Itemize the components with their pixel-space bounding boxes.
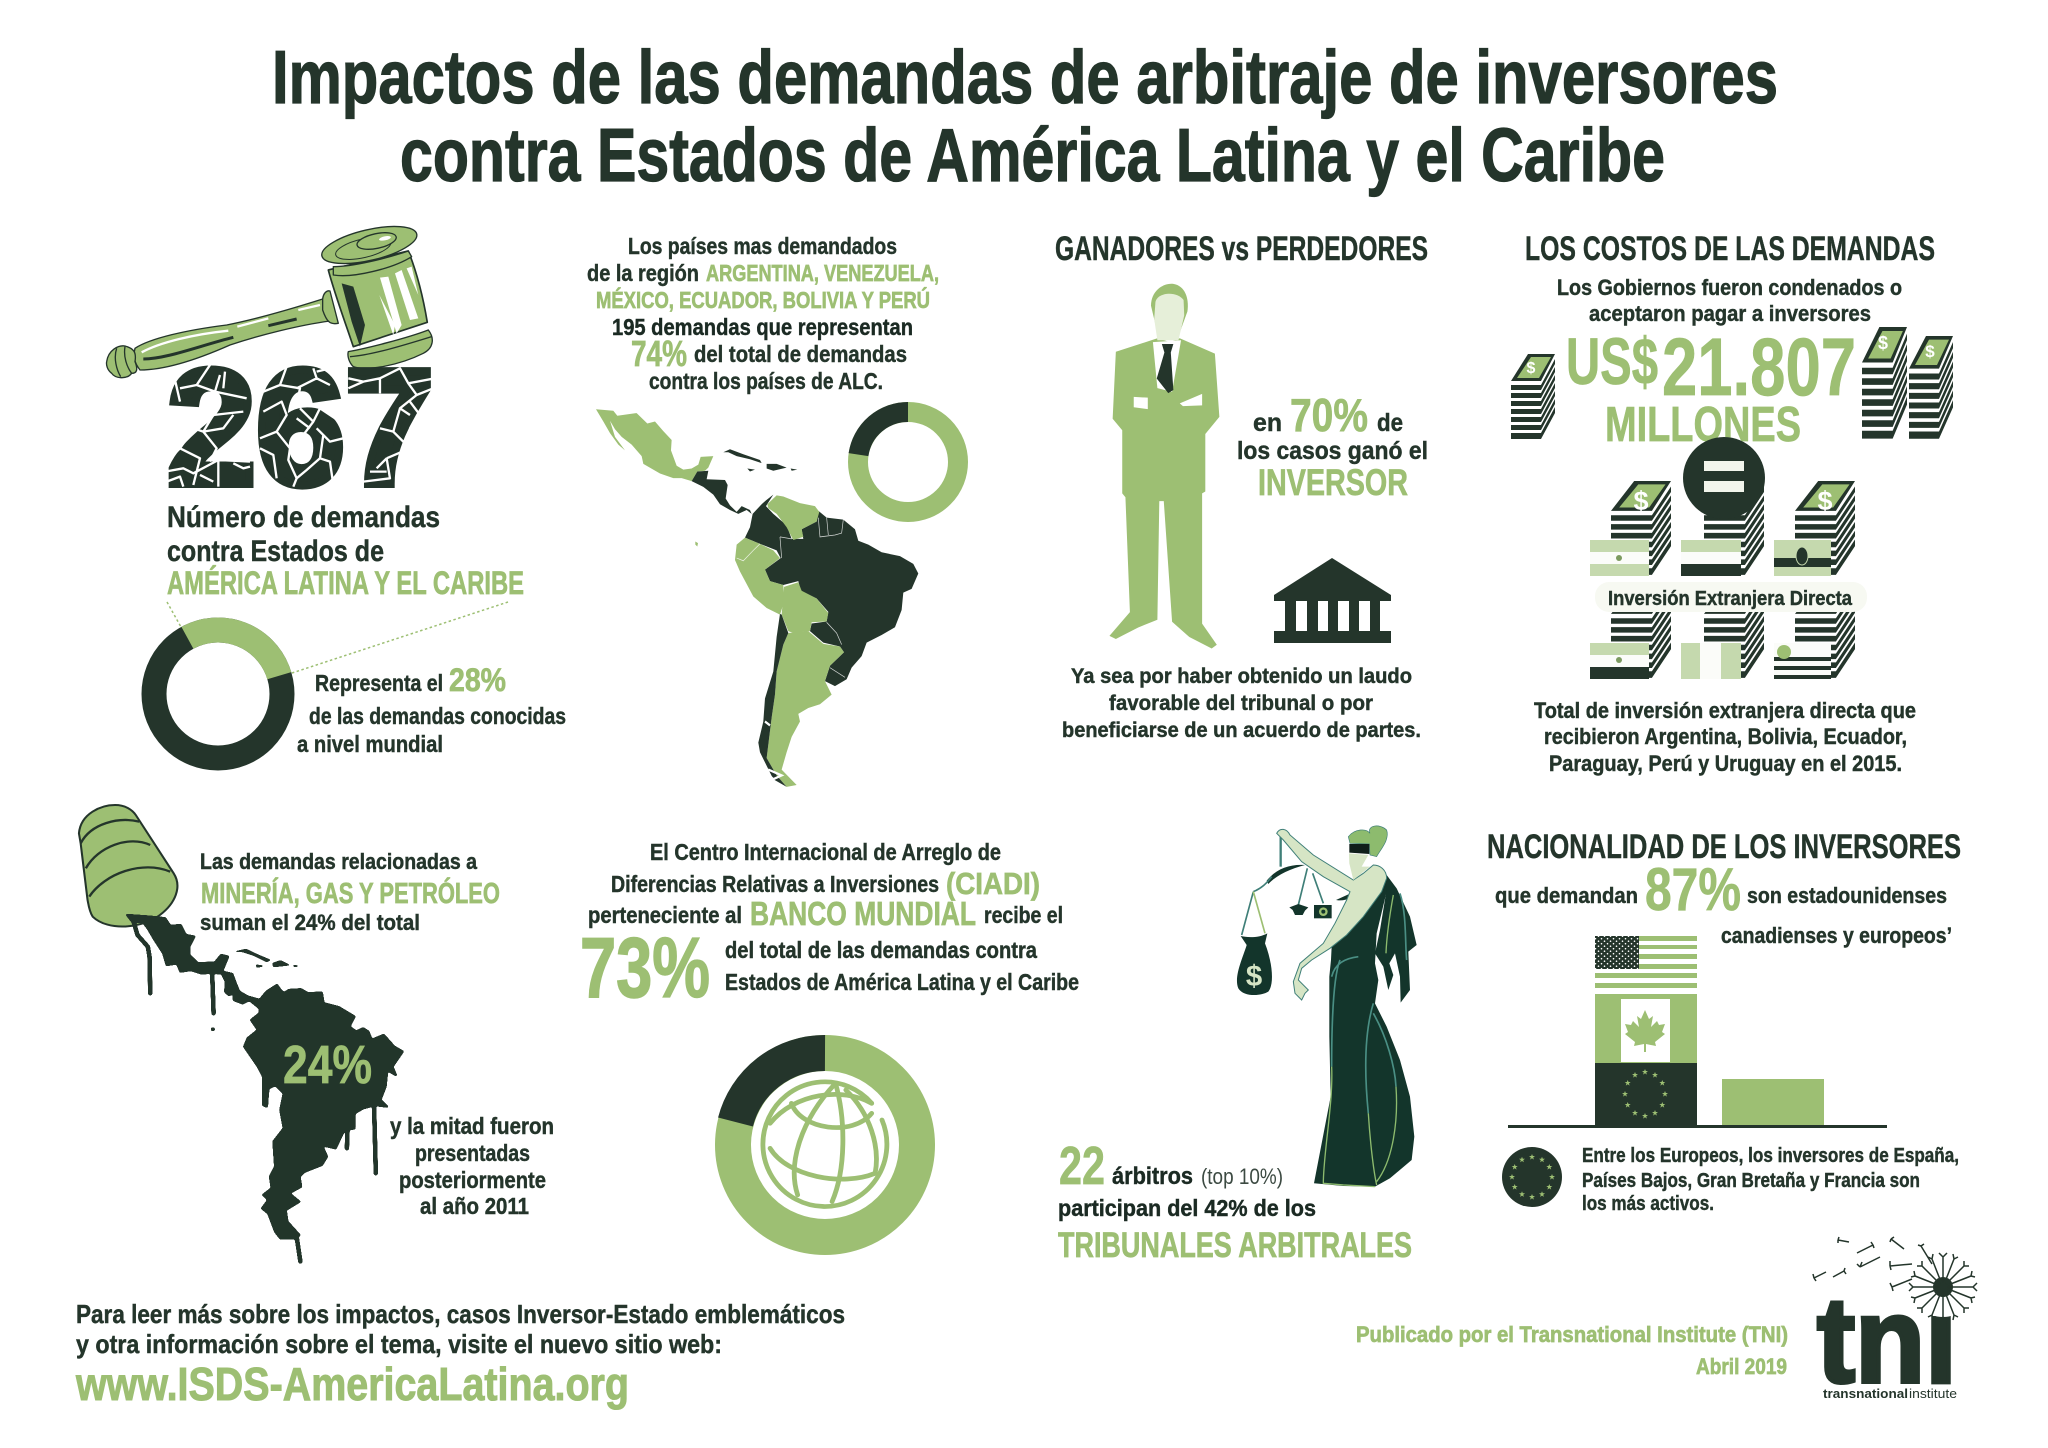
- text: 22 árbitros: 22: [1059, 1136, 1105, 1196]
- text: CIADI: [580, 839, 1079, 1016]
- text: 22 árbitros: (top 10%): [1201, 1164, 1283, 1189]
- number 24%: 24%: [283, 1035, 372, 1095]
- text: CIADI: (CIADI): [946, 866, 1040, 901]
- text: número de demandas: Número de demandas: [167, 501, 440, 534]
- icon: businessman: [1109, 284, 1219, 649]
- panel: ganadores vs perdedores: [1055, 230, 1428, 742]
- icon: money stacks row 1 with flags: $: [1817, 486, 1833, 516]
- text: total de inversión: Paraguay, Perú y Uruguay en el 2015.: [1549, 751, 1902, 776]
- text: CIADI: perteneciente al: [588, 902, 742, 928]
- title: [272, 35, 1778, 197]
- footer: publisher: Abril 2019: [1696, 1354, 1787, 1379]
- text: 22 árbitros: TRIBUNALES ARBITRALES: [1058, 1226, 1412, 1265]
- footer: website: www.ISDS-AmericaLatina.org: [75, 1358, 629, 1410]
- footer: website: y otra información sobre el tema, visite el nuevo sitio web:: [76, 1329, 722, 1359]
- donut chart: 28%: [154, 630, 282, 758]
- text: CIADI: del total de las demandas contra: [725, 937, 1037, 963]
- text: representa el 28%: a nivel mundial: [297, 731, 443, 757]
- icon: oil barrel and spill map: [79, 805, 403, 1262]
- text: representa el 28%: de las demandas conocidas: [309, 703, 566, 729]
- text: minería: MINERÍA, GAS Y PETRÓLEO: [201, 876, 500, 910]
- illustration: lady justice: $: [1246, 960, 1262, 993]
- text: número de demandas: [167, 501, 524, 601]
- number 267: 267: [167, 336, 434, 519]
- footer: website: [75, 1299, 845, 1410]
- panel: nacionalidad de los inversores: [1487, 828, 1961, 1215]
- text: mitad fueron: y la mitad fueron: [390, 1113, 554, 1139]
- panel: árbitros: [1058, 826, 1417, 1265]
- icon: dandelion: [1813, 1237, 1977, 1321]
- icon: money stack left: [1511, 354, 1555, 439]
- text: en 70%: los casos ganó el: [1237, 437, 1428, 465]
- text: en 70%: [1237, 389, 1428, 503]
- text: laudo: favorable del tribunal o por: [1109, 691, 1374, 715]
- icon: money stacks right: [1862, 327, 1953, 439]
- donut chart: 73%: [733, 1053, 917, 1237]
- panel: 267 demandas: [107, 219, 566, 758]
- text: gobiernos condenados: Los Gobiernos fueron condenados o: [1557, 275, 1902, 300]
- text: 87%: son estadounidenses: [1747, 883, 1947, 908]
- text: 22 árbitros: árbitros: [1112, 1163, 1193, 1190]
- text: 22 árbitros: [1058, 1136, 1412, 1265]
- icon: money stacks right: $: [1925, 342, 1935, 361]
- footer: publisher: Publicado por el Transnational Institute (TNI): [1356, 1322, 1788, 1347]
- text: europeos: Entre los Europeos, los inversores de España,: [1582, 1145, 1959, 1167]
- icon: money stacks row 1 with flags: [1590, 481, 1855, 576]
- amount: MILLONES: [1605, 398, 1801, 452]
- illustration: lady justice: [1237, 826, 1417, 1187]
- panel: costos de las demandas: [1511, 230, 1953, 776]
- amount: 21.807: [1662, 322, 1856, 413]
- icon: equals sign: [1683, 437, 1765, 519]
- heading: GANADORES vs PERDEDORES: [1055, 230, 1428, 268]
- text: 87%: 87%: [1645, 856, 1741, 923]
- text: total de inversión: Total de inversión extranjera directa que: [1534, 698, 1916, 723]
- text: laudo: Ya sea por haber obtenido un laudo: [1071, 664, 1412, 688]
- icon: money stacks right: $: [1878, 333, 1888, 353]
- icon: money stack left: $: [1527, 360, 1536, 377]
- footer: website: Para leer más sobre los impactos, casos Inversor-Estado emblemáticos: [76, 1299, 845, 1329]
- text: países: ARGENTINA, VENEZUELA,: [706, 260, 939, 286]
- bar: Canada flag: [1595, 994, 1697, 1063]
- text: gobiernos condenados: aceptaron pagar a inversores: [1589, 301, 1871, 326]
- wordmark: tni: [1817, 1272, 1957, 1408]
- text: representa el 28%: 28%: [449, 662, 506, 698]
- icon: money stacks row 2 with flags: [1590, 584, 1855, 679]
- icon: gavel: [107, 219, 432, 378]
- amount: [1566, 322, 1856, 452]
- text: 87%: [1495, 856, 1952, 948]
- text: países: MÉXICO, ECUADOR, BOLIVIA Y PERÚ: [596, 286, 930, 313]
- text: CIADI: BANCO MUNDIAL: [750, 895, 976, 932]
- text: total de inversión: [1534, 698, 1916, 776]
- panel: minería, gas y petróleo: [79, 805, 554, 1262]
- text: países: del total de demandas: [694, 341, 907, 367]
- text: en 70%: 70%: [1290, 389, 1368, 441]
- tagline: [1823, 1386, 1957, 1401]
- text: número de demandas: AMÉRICA LATINA Y EL CARIBE: [167, 565, 524, 601]
- text: CIADI: Estados de América Latina y el Caribe: [725, 969, 1079, 995]
- text: países: [587, 233, 939, 394]
- bar: EU flag: [1595, 1063, 1697, 1125]
- text: países: de la región: [587, 260, 699, 286]
- text: países: 195 demandas que representan: [612, 314, 913, 340]
- text: 87%: que demandan: [1495, 883, 1638, 908]
- text: mitad fueron: al año 2011: [420, 1193, 529, 1219]
- map: América Latina: [596, 409, 918, 787]
- axis: [1508, 1125, 1887, 1128]
- text: total de inversión: recibieron Argentina, Bolivia, Ecuador,: [1544, 724, 1907, 749]
- donut chart: 74%: [858, 412, 958, 512]
- icon: world bank globe: [763, 1082, 887, 1207]
- dotted callout lines: [167, 602, 508, 673]
- text: CIADI: El Centro Internacional de Arreglo de: [650, 839, 1001, 865]
- label: inversión extranjera directa: Inversión Extranjera Directa: [1608, 588, 1853, 610]
- tagline: institute: [1909, 1386, 1957, 1401]
- text: europeos: los más activos.: [1582, 1193, 1714, 1215]
- title: contra Estados de América Latina y el Caribe: [400, 113, 1665, 197]
- text: minería: suman el 24% del total: [200, 910, 420, 935]
- text: países: Los países mas demandados: [628, 233, 897, 259]
- text: laudo: beneficiarse de un acuerdo de partes.: [1062, 718, 1421, 742]
- text: en 70%: en: [1253, 409, 1282, 437]
- tagline: transnational: [1823, 1386, 1908, 1401]
- text: CIADI: 73%: [580, 921, 710, 1016]
- icon: money stacks row 1 with flags: $: [1633, 486, 1649, 516]
- label: inversión extranjera directa: [1595, 582, 1867, 612]
- text: número de demandas: contra Estados de: [167, 535, 384, 568]
- text: mitad fueron: posteriormente: [399, 1167, 546, 1193]
- text: minería: Las demandas relacionadas a: [200, 849, 478, 874]
- text: representa el 28%: [297, 662, 566, 757]
- text: en 70%: de: [1377, 409, 1403, 437]
- text: mitad fueron: presentadas: [415, 1140, 530, 1166]
- panel: CIADI: [580, 839, 1079, 1237]
- logo: tni: [1813, 1237, 1977, 1408]
- text: representa el 28%: Representa el: [315, 670, 443, 696]
- icon: bank building: [1274, 558, 1391, 643]
- amount: US$: [1566, 324, 1658, 398]
- text: europeos: Países Bajos, Gran Bretaña y Francia son: [1582, 1170, 1920, 1192]
- panel: países más demandados: [587, 233, 958, 787]
- text: laudo: [1062, 664, 1421, 742]
- bar: others: [1722, 1079, 1824, 1125]
- text: europeos: [1582, 1145, 1959, 1215]
- text: países: 74%: [631, 333, 687, 374]
- text: minería: [200, 849, 500, 935]
- text: 22 árbitros: participan del 42% de los: [1058, 1195, 1316, 1221]
- text: CIADI: Diferencias Relativas a Inversiones: [611, 871, 939, 897]
- text: países: contra los países de ALC.: [649, 368, 883, 394]
- bar chart: nationality: [1508, 936, 1887, 1128]
- text: gobiernos condenados: [1557, 275, 1902, 326]
- text: 87%: canadienses y europeos’: [1721, 923, 1952, 948]
- text: en 70%: INVERSOR: [1258, 462, 1408, 503]
- bar: USA flag: [1595, 936, 1697, 988]
- text: mitad fueron: [390, 1113, 554, 1219]
- icon: EU circle: [1502, 1147, 1562, 1207]
- text: CIADI: recibe el: [984, 902, 1063, 928]
- footer: publisher: [1356, 1322, 1788, 1379]
